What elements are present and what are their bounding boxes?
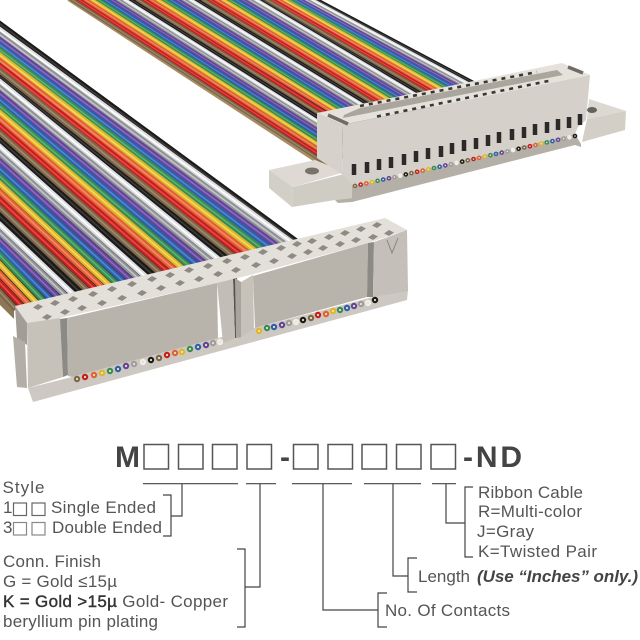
connector: lower left socket bbox=[13, 218, 408, 402]
legend: length: (Use “Inches” only.) bbox=[477, 567, 638, 586]
centre tab right bbox=[235, 275, 254, 338]
legend: ribbon cable: J=Gray bbox=[477, 522, 534, 541]
legend: style: 1 bbox=[3, 498, 12, 517]
legend: style bbox=[2, 478, 162, 537]
code boxes bbox=[144, 444, 456, 469]
right end block bbox=[373, 230, 408, 297]
legend: connector finish: G = Gold ≤15µ bbox=[3, 572, 117, 591]
centre tab left bbox=[217, 279, 235, 343]
left end block bbox=[27, 318, 63, 388]
connector lower band bbox=[335, 134, 581, 203]
suffix -ND: -ND bbox=[463, 441, 522, 474]
legend: style: Style bbox=[2, 478, 44, 497]
connector recess bbox=[343, 70, 563, 118]
legend: connector finish: Conn. Finish bbox=[3, 552, 101, 571]
ribbon cable: lower left bbox=[0, 22, 296, 319]
left polarising slot bbox=[60, 318, 68, 377]
left mounting flange bbox=[269, 160, 352, 207]
leader lines bbox=[143, 484, 473, 627]
part number code bbox=[115, 441, 522, 474]
ribbon cable: upper right bbox=[71, 0, 473, 169]
legend: ribbon cable: R=Multi-color bbox=[478, 502, 582, 521]
right front panel bbox=[253, 243, 368, 328]
connector body front bbox=[342, 75, 590, 186]
prefix M: M bbox=[115, 441, 140, 474]
front windows bbox=[354, 114, 580, 175]
centre gap bbox=[233, 278, 241, 338]
lower lip bbox=[28, 290, 408, 402]
legend: connector finish: beryllium pin plating bbox=[3, 612, 158, 631]
legend: style: 3 bbox=[3, 518, 12, 537]
legend: ribbon cable: K=Twisted Pair bbox=[478, 542, 597, 561]
contact holes: front row bbox=[42, 230, 394, 320]
top face bbox=[15, 218, 407, 323]
legend: style: Double Ended bbox=[52, 518, 162, 537]
legend: ribbon cable bbox=[477, 483, 597, 561]
legend: ribbon cable: Ribbon Cable bbox=[478, 483, 583, 502]
contact holes: back row bbox=[33, 222, 382, 310]
legend: length: Length bbox=[418, 567, 470, 586]
end slots bbox=[328, 67, 583, 124]
connector body side bbox=[317, 113, 343, 175]
right polarising slot bbox=[367, 242, 374, 297]
wire ends bbox=[355, 136, 575, 186]
right mounting flange bbox=[582, 99, 626, 142]
wire ends bbox=[77, 300, 375, 379]
legend: number of contacts: No. Of Contacts bbox=[385, 601, 510, 620]
legend: connector finish: K = Gold >15µ Gold- Copper bbox=[3, 592, 228, 611]
contact hole rows bbox=[360, 72, 553, 116]
legend: style: Single Ended bbox=[51, 498, 156, 517]
legend: connector finish bbox=[3, 552, 228, 631]
left front panel bbox=[67, 283, 218, 377]
polarity V mark bbox=[387, 238, 398, 253]
connector top face bbox=[317, 63, 590, 125]
connector: upper right double-ended header bbox=[269, 63, 626, 207]
dash: - bbox=[280, 441, 290, 474]
left side faces and clip bbox=[13, 306, 27, 388]
